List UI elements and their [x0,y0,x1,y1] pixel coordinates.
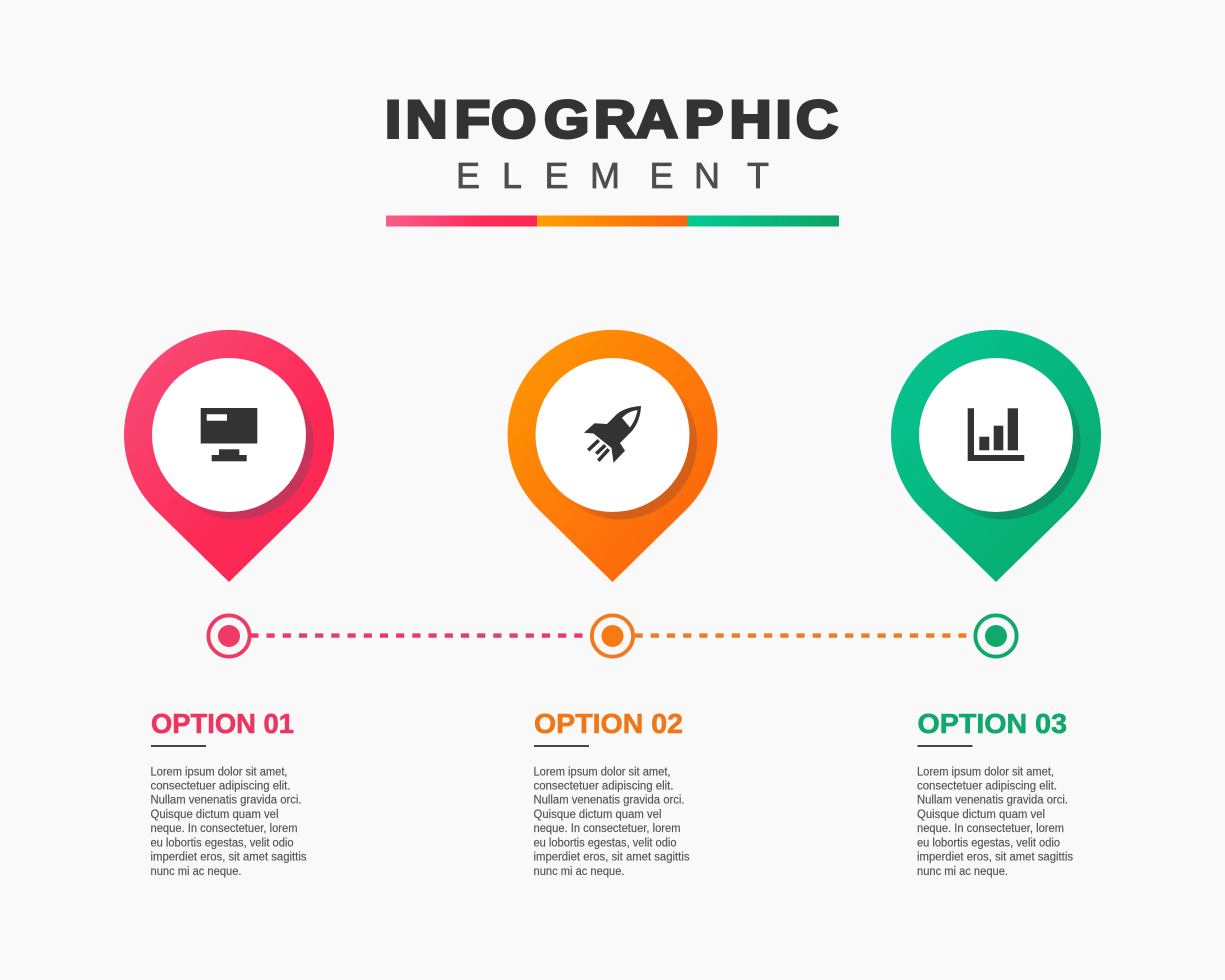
pin 3: green with bar chart icon [891,330,1101,582]
heading: option 01: OPTION 01 [151,708,294,739]
body text: eu lobortis egestas, velit odio [917,837,1060,849]
body text: consectetuer adipiscing elit. [150,780,290,792]
timeline [208,615,1017,657]
body text: Quisque dictum quam vel [917,809,1045,821]
body text: imperdiet eros, sit amet sagittis [150,852,307,864]
body text: imperdiet eros, sit amet sagittis [917,852,1073,864]
body text: nunc mi ac neque. [150,866,242,878]
body text [150,766,307,878]
pin 2: orange with rocket icon [508,330,718,582]
marker 2 [592,615,633,657]
subtitle: ELEMENT: ELEMENT [456,155,769,196]
body text: nunc mi ac neque. [917,866,1008,878]
body text: consectetuer adipiscing elit. [917,780,1057,792]
dashed connector: red [251,633,583,638]
pin 1: red with monitor icon [124,330,334,582]
dashed connector: orange [635,633,966,638]
title: INFOGRAPHIC: INFOGRAPHIC [385,90,838,149]
heading: option 02: OPTION 02 [534,708,683,739]
tricolor title bar [386,216,839,226]
icon: bar chart [968,408,1024,461]
marker 1 [208,615,250,657]
option 2 text block [534,708,690,878]
body text: Nullam venenatis gravida orci. [917,795,1068,807]
heading: option 03: OPTION 03 [918,708,1067,739]
body text: neque. In consectetuer, lorem [150,823,298,835]
icon: rocket [584,406,641,463]
option 1 text block [150,708,307,878]
body text: nunc mi ac neque. [534,866,624,878]
underline [918,745,972,747]
body text: Quisque dictum quam vel [534,809,662,821]
body text [534,766,690,878]
marker 3 [975,615,1017,657]
body text: eu lobortis egestas, velit odio [150,837,294,849]
body text: Lorem ipsum dolor sit amet, [150,766,288,778]
underline [151,745,206,747]
body text: Nullam venenatis gravida orci. [150,795,302,807]
option 3 text block [917,708,1073,878]
body text: neque. In consectetuer, lorem [534,823,680,835]
body text: imperdiet eros, sit amet sagittis [534,852,690,864]
body text: eu lobortis egestas, velit odio [534,837,676,849]
body text [917,766,1073,878]
body text: neque. In consectetuer, lorem [917,823,1064,835]
body text: Lorem ipsum dolor sit amet, [917,766,1054,778]
icon: monitor [201,408,257,461]
body text: Lorem ipsum dolor sit amet, [534,766,670,778]
body text: Nullam venenatis gravida orci. [534,795,684,807]
body text: Quisque dictum quam vel [150,809,278,821]
body text: consectetuer adipiscing elit. [534,780,674,792]
underline [534,745,589,747]
